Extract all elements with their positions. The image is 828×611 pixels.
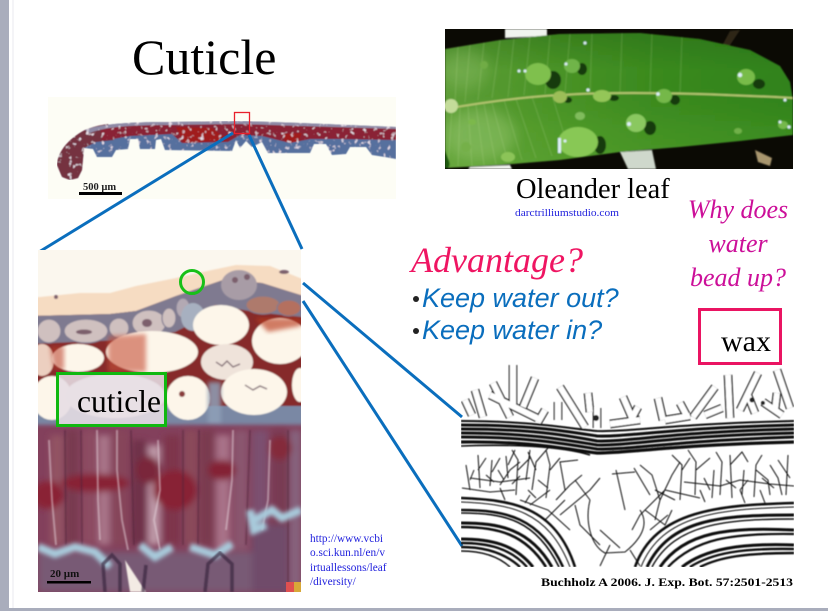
scale bar: 20 µm [47,570,91,584]
source url: http://www.vcbi [310,533,383,545]
question: why does water bead up: Why does [688,195,788,224]
callout: cuticle label: cuticle [77,384,161,419]
leaf ribbing and sheen [441,33,682,168]
title: Cuticle [132,29,276,85]
image: oleander leaf with water droplets [441,29,793,169]
image: leaf cross-section overview [48,97,396,199]
callout: cuticle label [58,374,166,426]
zoom selection box [234,112,250,134]
bullet: keep water in: Keep water in? [422,315,602,345]
citation: Buchholz A 2006. J. Exp. Bot. 57:2501-2513 [541,575,793,589]
question: why does water bead up: bead up? [690,263,786,292]
bullet list: keep water out or in [413,283,619,345]
source url: /diversity/ [310,576,357,588]
zoom line: overview to micrograph left [39,133,233,252]
caption: Oleander leaf: Oleander leaf [516,174,670,205]
image: micrograph of leaf tissue [30,250,310,600]
cuticle proper: dark lamellae [461,421,794,455]
scale bar: 20 µm: 20 µm [50,568,79,580]
cell wall fibrils [462,448,794,566]
zoom line: micrograph to diagram top [303,283,462,417]
source url: irtuallessons/leaf [310,562,387,574]
large parenchyma cells [30,305,308,420]
source url: o.sci.kun.nl/en/v [310,547,385,559]
callout: wax label [700,310,780,364]
wax crystals [465,365,790,428]
credit: darctrilliumstudio.com: darctrilliumstudio.com [515,207,619,219]
zoom line: micrograph to diagram bottom [303,301,462,546]
zoom line: overview to micrograph right [249,135,302,249]
source url [310,533,387,588]
palisade cell walls [49,430,288,592]
leaf section body [57,121,396,180]
green circle marking cuticle [180,270,204,294]
epidermal wall layers: left [461,498,575,567]
scale bar: 500 µm [79,182,122,195]
epidermal wall layers: right [635,503,794,567]
drop shadows [545,63,765,154]
question: why does water bead up: water [708,229,768,258]
question: advantage: Advantage? [409,240,583,280]
callout: wax label: wax [721,325,771,358]
cuticle layer [38,264,301,316]
water droplets [444,59,788,162]
leaf midrib [445,93,793,109]
diagram: wax crystals and cuticle layers [461,365,794,567]
epidermis cells [37,270,301,343]
dark intercellular background [38,282,301,407]
question: why does water bead up [688,195,788,292]
blue-grey epidermal band [30,280,310,344]
droplet highlights [518,42,791,153]
scale bar: 500 µm: 500 µm [83,182,116,193]
bullet: keep water out: Keep water out? [422,283,619,313]
corner logo [286,582,301,592]
palisade tissue [30,425,310,600]
pale blue vascular tissue [38,510,301,567]
